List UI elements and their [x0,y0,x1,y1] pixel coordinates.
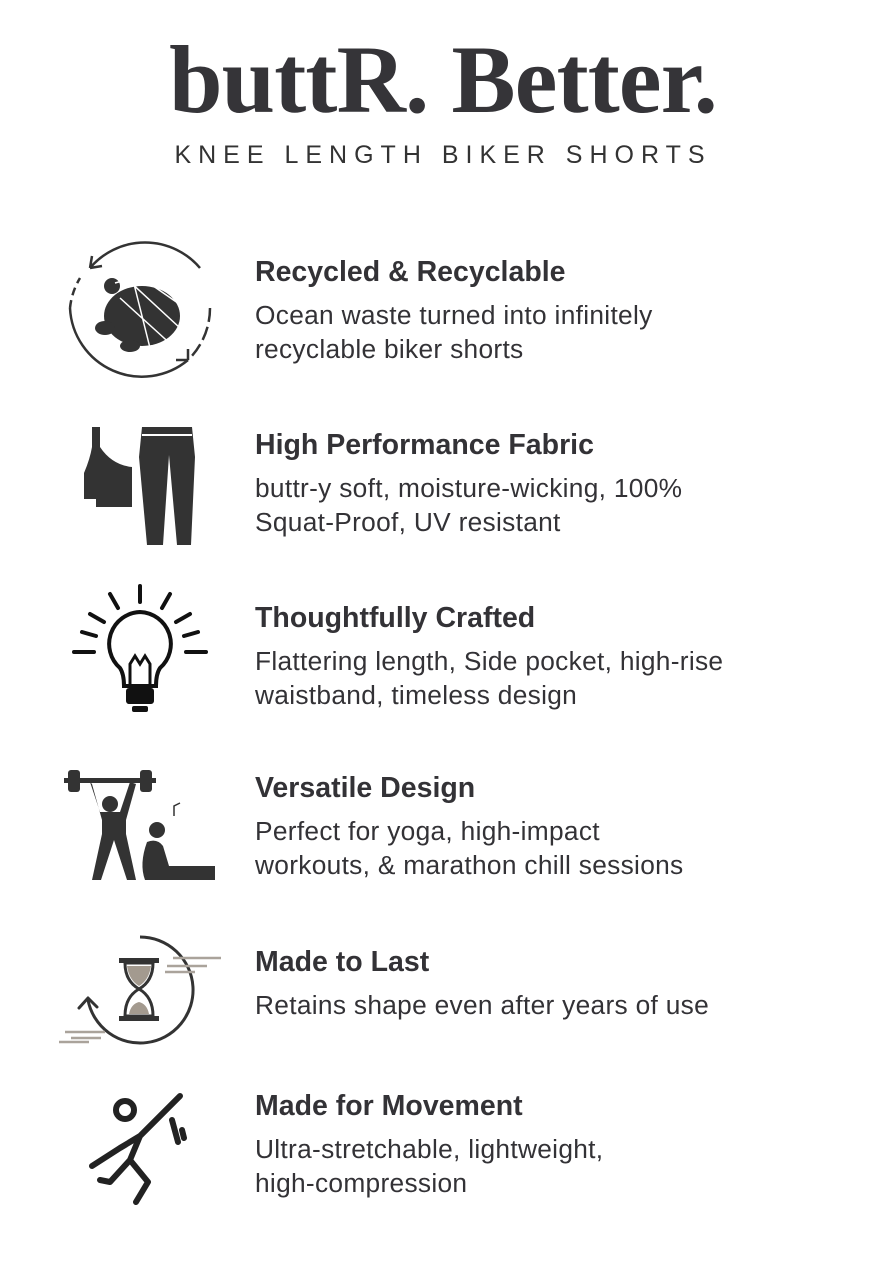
heading block: versatile: Perfect for yoga, high-impact [255,816,600,846]
heading block: crafted: Thoughtfully Crafted [255,602,535,634]
heading block: movement [255,1090,603,1198]
heading block: last [255,946,709,1020]
heading block: recycled: Ocean waste turned into infinitely [255,300,653,330]
heading block: movement: high-compression [255,1168,467,1198]
heading block: fabric [255,429,682,537]
heading block: crafted [255,602,723,710]
heading block: versatile [255,772,684,880]
heading block: fabric: High Performance Fabric [255,429,594,461]
heading block: crafted: waistband, timeless design [255,680,577,710]
heading block: fabric: buttr-y soft, moisture-wicking, 100% [255,473,682,503]
heading block: last: Made to Last [255,946,429,978]
icon: hourglass [59,936,221,1044]
icon: bra and leggings [84,427,195,545]
title: buttR. Better. [169,26,717,133]
icon: recycled turtle [68,241,212,378]
heading block: recycled: Recycled & Recyclable [255,256,566,288]
heading block: fabric: Squat-Proof, UV resistant [255,507,561,537]
subtitle: KNEE LENGTH BIKER SHORTS [174,141,712,169]
heading block: recycled: recyclable biker shorts [255,334,524,364]
heading block: recycled [255,256,653,364]
heading block: versatile: workouts, & marathon chill sessions [255,850,684,880]
heading block: movement: Ultra-stretchable, lightweight, [255,1134,603,1164]
heading block: crafted: Flattering length, Side pocket, high-rise [255,646,723,676]
heading block: versatile: Versatile Design [255,772,475,804]
icon: dancer [89,1093,187,1205]
icon: light bulb [72,584,208,712]
heading block: movement: Made for Movement [255,1090,523,1122]
heading block: last: Retains shape even after years of use [255,990,709,1020]
icon: weightlifter and relaxing person [64,770,215,880]
